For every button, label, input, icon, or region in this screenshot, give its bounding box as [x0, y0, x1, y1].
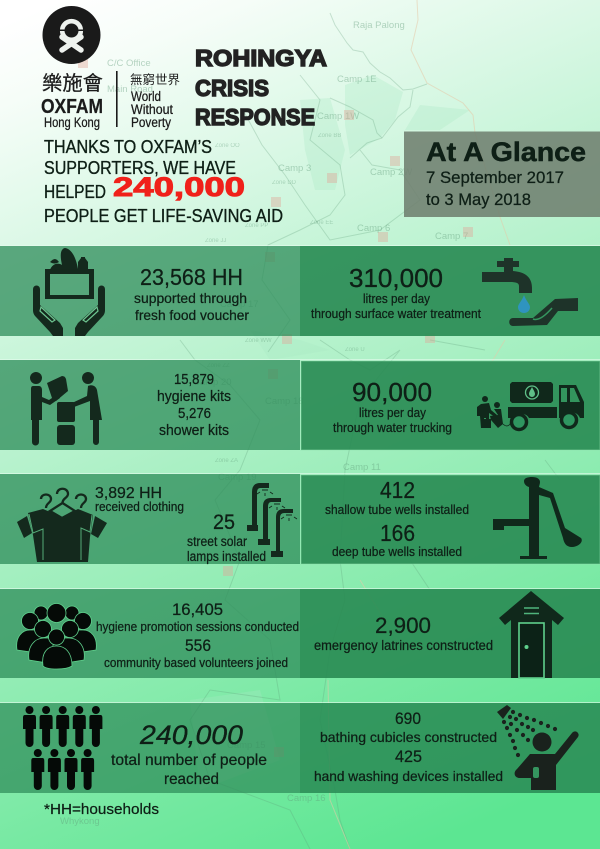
map labels: C/C Office: [107, 58, 151, 69]
stat: 310,000: 310,000: [349, 263, 443, 293]
logo slogan english: World: [131, 89, 161, 104]
panel: total people: [0, 703, 300, 793]
logo slogan english: Without: [131, 102, 173, 117]
map labels: Camp 1W: [317, 111, 359, 122]
stat: latrines: [314, 613, 493, 653]
icon: oxfam circle: [42, 6, 100, 64]
panel: latrines: [300, 589, 600, 678]
map labels: Camp 11: [343, 462, 381, 473]
map labels: Camp 18: [265, 396, 304, 407]
map tinted areas: [190, 75, 470, 790]
map labels: Camp 20: [193, 377, 232, 388]
stat: bathing and hand washing: 425: [395, 747, 422, 766]
stat: wells: deep tube wells installed: [332, 544, 462, 559]
map labels: Camp 6: [357, 223, 390, 234]
title: RESPONSE: [195, 104, 315, 130]
panel: tube wells: [301, 475, 600, 564]
logo oxfam wordmark: OXFAM: [41, 96, 103, 118]
row highlight strips: [0, 245, 600, 703]
map labels: Zone U: [345, 347, 365, 353]
road line: [328, 0, 510, 849]
stat: 90,000: [333, 377, 452, 435]
stat: bathing and hand washing: bathing cubicles constructed: [320, 729, 497, 745]
map labels: Zone WW: [245, 338, 272, 344]
map labels: Zone DD: [272, 180, 297, 186]
stat: wells: 166: [380, 520, 415, 546]
stat: 310,000: [311, 263, 481, 321]
map labels: Camp 19: [218, 472, 257, 483]
stat: kits: 15,879: [174, 371, 214, 388]
icon: people: [23, 706, 102, 790]
stat: 90,000: litres per day: [359, 405, 426, 420]
logo slogan english: Poverty: [131, 115, 171, 130]
stat: wells: [325, 477, 469, 559]
title: [195, 45, 327, 130]
panel: clothing and lamps: [0, 474, 300, 564]
stat: lamps: street solar: [187, 534, 247, 549]
map labels: Zone OO: [215, 143, 240, 149]
stat: bathing and hand washing: 690: [395, 709, 421, 728]
stat: 90,000: through water trucking: [333, 420, 452, 435]
icon: hands holding food box: [33, 248, 105, 336]
map labels: Whykong: [60, 816, 100, 827]
stat: lamps: lamps installed: [187, 549, 266, 564]
panel: surface water treatment: [300, 246, 600, 336]
red number: 240,000: [113, 172, 245, 202]
panel: water trucking: [301, 361, 600, 450]
title: ROHINGYA: [195, 45, 327, 71]
stat: clothing: received clothing: [95, 499, 184, 514]
map labels: Camp 1E: [337, 74, 377, 85]
stat: clothing: 3,892 HH: [95, 485, 162, 502]
icon: street solar lamps: [247, 483, 297, 557]
logo slogan chinese: 無窮世界: [130, 72, 180, 87]
stat: kits: 5,276: [178, 405, 211, 422]
icon: crowd: [17, 604, 96, 669]
map labels: Main Road: [107, 84, 153, 95]
logo chinese name: 樂施會: [42, 72, 103, 95]
stat: 23,568 HH: 23,568 HH: [140, 264, 243, 290]
panel: hygiene kits: [0, 360, 300, 450]
stat: bathing and hand washing: [314, 709, 503, 784]
stat: lamps: [187, 511, 266, 564]
map labels: Camp 16: [287, 793, 326, 804]
panel: at a glance: At A Glance: [426, 137, 586, 167]
map labels: Zone BB: [318, 133, 341, 139]
stat: hygiene promotion: 556: [185, 636, 211, 655]
map labels: Zone ZA: [215, 458, 238, 464]
icon: latrine hut: [499, 591, 564, 678]
stat: 310,000: litres per day: [363, 291, 430, 306]
intro text: SUPPORTERS, WE HAVE: [44, 158, 236, 178]
title: CRISIS: [195, 75, 269, 101]
icon: water truck: [477, 382, 584, 430]
map labels: Camp 15: [227, 740, 266, 751]
icon: people exchanging kits: [30, 372, 102, 446]
logo: Oxfam Hong Kong: [41, 6, 180, 130]
stat: kits: shower kits: [159, 422, 229, 439]
stat: wells: shallow tube wells installed: [325, 502, 469, 517]
stat: wells: 412: [380, 477, 415, 503]
intro text: HELPED: [44, 182, 106, 202]
stat: hygiene promotion: 16,405: [172, 600, 223, 619]
stat: 90,000: 90,000: [352, 377, 432, 407]
stat: hygiene promotion: hygiene promotion sessions conducted: [96, 619, 299, 634]
stat: 23,568 HH: [134, 264, 249, 323]
stat: latrines: emergency latrines constructed: [314, 638, 493, 653]
icon: t-shirt on hangers: [17, 489, 107, 562]
intro text: [44, 137, 283, 226]
map labels: [60, 20, 468, 827]
panel: at a glance: to 3 May 2018: [426, 190, 531, 209]
stat: latrines: 2,900: [375, 613, 431, 638]
stat: lamps: 25: [213, 511, 235, 534]
map labels: Camp 17: [220, 299, 259, 310]
stat: kits: [157, 371, 231, 439]
stat: 240,000 total: [111, 720, 267, 788]
stat: hygiene promotion: community based volunteers joined: [104, 655, 288, 670]
stat: bathing and hand washing: hand washing devices installed: [314, 768, 503, 784]
map labels: Zone JJ: [205, 238, 226, 244]
stat: clothing: [95, 485, 184, 514]
panel: fresh food voucher: [0, 246, 300, 336]
map labels: Zone EE: [310, 220, 333, 226]
stat: 240,000 total: total number of people: [111, 752, 267, 769]
map background: [180, 13, 560, 849]
icon: person showering: [497, 705, 579, 790]
map labels: Zone ZZ: [207, 363, 230, 369]
panel: at a glance: [404, 132, 600, 217]
stat: 23,568 HH: supported through: [134, 290, 247, 306]
intro text: PEOPLE GET LIFE-SAVING AID: [44, 206, 283, 226]
icon: hand pump: [493, 477, 582, 559]
map labels: Camp 7: [435, 231, 468, 242]
map labels: Camp 2W: [370, 167, 412, 178]
map markers: [78, 58, 473, 757]
stat: 240,000 total: reached: [164, 771, 219, 788]
stat: 240,000 total: 240,000: [139, 720, 243, 750]
logo slogan english: [131, 89, 173, 130]
stat: hygiene promotion: [96, 600, 299, 670]
map labels: Zone PP: [245, 223, 268, 229]
stat: 23,568 HH: fresh food voucher: [135, 307, 249, 323]
map labels: Camp 3: [278, 163, 311, 174]
map labels: Raja Palong: [353, 20, 405, 31]
stat: kits: hygiene kits: [157, 388, 231, 405]
panel: at a glance: 7 September 2017: [426, 168, 564, 187]
panel: bathing and hand washing: [300, 703, 600, 793]
icon: tap and hand: [482, 258, 578, 326]
panel: hygiene promotion: [0, 589, 300, 678]
logo hong kong: Hong Kong: [44, 115, 100, 130]
stat: 310,000: through surface water treatment: [311, 306, 481, 321]
intro text: THANKS TO OXFAM’S: [44, 137, 212, 157]
footnote: *HH=households: [44, 801, 159, 818]
